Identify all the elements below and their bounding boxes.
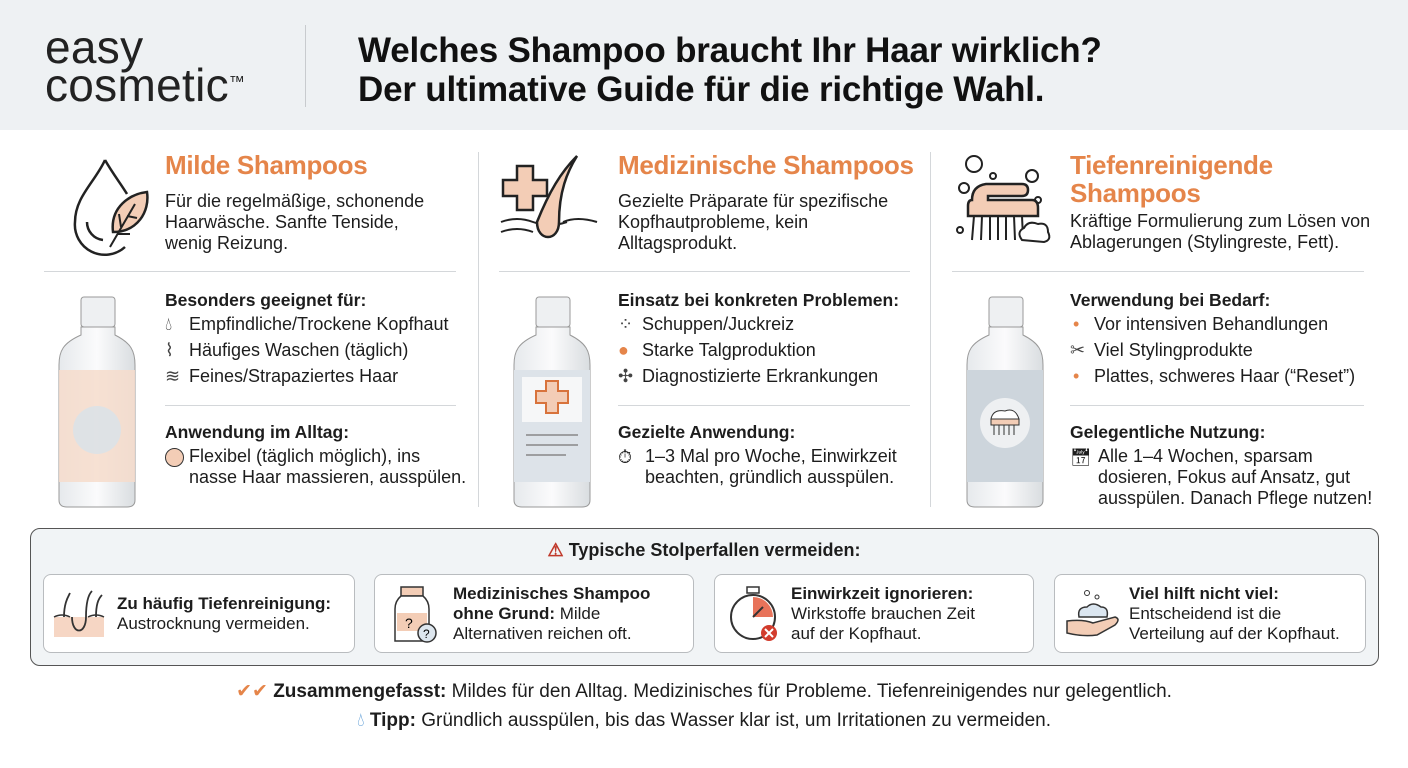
heading: Milde Shampoos	[165, 150, 367, 180]
list: bedarf: Vor intensiven Behandlungen	[1094, 314, 1328, 334]
description: Haarwäsche. Sanfte Tenside,	[165, 212, 399, 232]
title	[358, 31, 1102, 109]
list: bedarf: Verwendung bei Bedarf:	[1070, 290, 1270, 310]
list: bedarf: •	[1073, 366, 1079, 386]
card: einwirkzeit: auf der Kopfhaut.	[791, 624, 921, 643]
description: wenig Reizung.	[165, 233, 288, 253]
list: probleme: ●	[618, 340, 629, 360]
card: einwirkzeit	[714, 574, 1034, 653]
description: Ablagerungen (Stylingreste, Fett).	[1070, 232, 1339, 252]
header band	[0, 0, 1408, 130]
card: viel hilft nicht viel: Viel hilft nicht viel:	[1129, 584, 1279, 603]
list: geeignet fuer: ⌇	[165, 340, 174, 360]
card: viel hilft nicht viel: Verteilung auf der Kopfhaut.	[1129, 624, 1340, 643]
list: geeignet fuer: Häufiges Waschen (täglich)	[189, 340, 408, 360]
card: medizinisch ohne grund	[374, 574, 694, 653]
anwendung	[1070, 422, 1372, 508]
anwendung: Gezielte Anwendung:	[618, 422, 795, 442]
anwendung	[165, 422, 466, 487]
bottle	[58, 296, 136, 508]
heading: warning: ⚠ Typische Stolperfallen vermeiden:	[548, 540, 860, 560]
summary: ✔✔ Zusammengefasst: Mildes für den Alltag. Medizinisches für Probleme. Tiefenreinigendes nur gelegentlich.	[236, 681, 1172, 702]
title: Der ultimative Guide für die richtige Wahl.	[358, 70, 1044, 109]
description: Gezielte Präparate für spezifische	[618, 191, 888, 211]
list: probleme: Diagnostizierte Erkrankungen	[642, 366, 878, 386]
icon: hair skin	[54, 590, 104, 637]
logo	[45, 21, 245, 111]
list: probleme	[618, 290, 899, 386]
description	[165, 191, 424, 253]
list: probleme: ⁘	[618, 314, 633, 334]
list: probleme: ✣	[618, 366, 633, 386]
list: geeignet fuer: Empfindliche/Trockene Kopfhaut	[189, 314, 448, 334]
card: medizinisch ohne grund: ohne Grund: Milde	[453, 604, 600, 623]
list: probleme: Einsatz bei konkreten Problemen:	[618, 290, 899, 310]
list: bedarf: ✂	[1070, 340, 1085, 360]
list: geeignet fuer: 💧︎	[165, 314, 172, 334]
description	[618, 191, 888, 253]
logo: easy	[45, 21, 143, 73]
list: geeignet fuer	[165, 290, 448, 386]
icon: cross and hair	[500, 155, 598, 238]
icon: hand with foam	[1066, 590, 1119, 636]
anwendung: ausspülen. Danach Pflege nutzen!	[1098, 488, 1372, 508]
anwendung: 📅︎	[1070, 448, 1092, 467]
card: einwirkzeit: Wirkstoffe brauchen Zeit	[791, 604, 975, 623]
card: tiefenreinigung	[43, 574, 355, 653]
anwendung: 1–3 Mal pro Woche, Einwirkzeit	[645, 446, 897, 466]
list: bedarf: •	[1073, 314, 1079, 334]
bottle	[514, 296, 590, 508]
heading: Shampoos	[1070, 178, 1201, 208]
list: geeignet fuer: Feines/Strapaziertes Haar	[189, 366, 398, 386]
card: viel hilft nicht viel: Entscheidend ist die	[1129, 604, 1281, 623]
list: probleme: Schuppen/Juckreiz	[642, 314, 794, 334]
tip: 💧︎ Tipp: Gründlich ausspülen, bis das Wasser klar ist, um Irritationen zu vermeiden.	[357, 710, 1051, 731]
title: Welches Shampoo braucht Ihr Haar wirklich?	[358, 31, 1102, 70]
card: viel hilft nicht viel	[1054, 574, 1366, 653]
panel: milde shampoos	[44, 150, 466, 508]
panel: stolperfallen	[30, 528, 1379, 666]
anwendung: nasse Haar massieren, ausspülen.	[189, 467, 466, 487]
heading	[1070, 150, 1273, 208]
icon: pill bottle: ?	[423, 627, 430, 641]
list: bedarf	[1070, 290, 1355, 386]
list: geeignet fuer: ≋	[165, 366, 180, 386]
heading: Medizinische Shampoos	[618, 150, 914, 180]
icon: brush with bubbles	[956, 155, 1050, 243]
card: medizinisch ohne grund: Medizinisches Shampoo	[453, 584, 650, 603]
bottle	[966, 296, 1044, 508]
description: Alltagsprodukt.	[618, 233, 737, 253]
heading: Tiefenreinigende	[1070, 150, 1273, 180]
anwendung: Flexibel (täglich möglich), ins	[189, 446, 420, 466]
card: medizinisch ohne grund: Alternativen reichen oft.	[453, 624, 632, 643]
panel: medizinische shampoos	[499, 150, 914, 508]
icon: pill bottle: ?	[405, 615, 413, 631]
icon: pill bottle	[394, 586, 437, 643]
description	[1070, 211, 1370, 252]
description: Kopfhautprobleme, kein	[618, 212, 808, 232]
card: einwirkzeit: Einwirkzeit ignorieren:	[791, 584, 973, 603]
card: tiefenreinigung: Austrocknung vermeiden.	[117, 614, 310, 633]
list: probleme: Starke Talgproduktion	[642, 340, 816, 360]
description: Für die regelmäßige, schonende	[165, 191, 424, 211]
list: geeignet fuer: Besonders geeignet für:	[165, 290, 366, 310]
list: bedarf: Plattes, schweres Haar (“Reset”)	[1094, 366, 1355, 386]
icon: drop with leaf	[74, 159, 149, 256]
card: tiefenreinigung: Zu häufig Tiefenreinigung:	[117, 594, 331, 613]
anwendung: beachten, gründlich ausspülen.	[645, 467, 894, 487]
anwendung: Alle 1–4 Wochen, sparsam	[1098, 446, 1313, 466]
anwendung	[618, 422, 897, 487]
description: Kräftige Formulierung zum Lösen von	[1070, 211, 1370, 231]
list: bedarf: Viel Stylingprodukte	[1094, 340, 1253, 360]
anwendung: Gelegentliche Nutzung:	[1070, 422, 1265, 442]
anwendung: ⏱	[618, 447, 632, 467]
anwendung: Anwendung im Alltag:	[165, 422, 349, 442]
logo: cosmetic™	[45, 59, 245, 111]
anwendung: dosieren, Fokus auf Ansatz, gut	[1098, 467, 1350, 487]
icon: stopwatch	[730, 586, 777, 641]
panel: tiefenreinigende shampoos	[952, 150, 1372, 508]
